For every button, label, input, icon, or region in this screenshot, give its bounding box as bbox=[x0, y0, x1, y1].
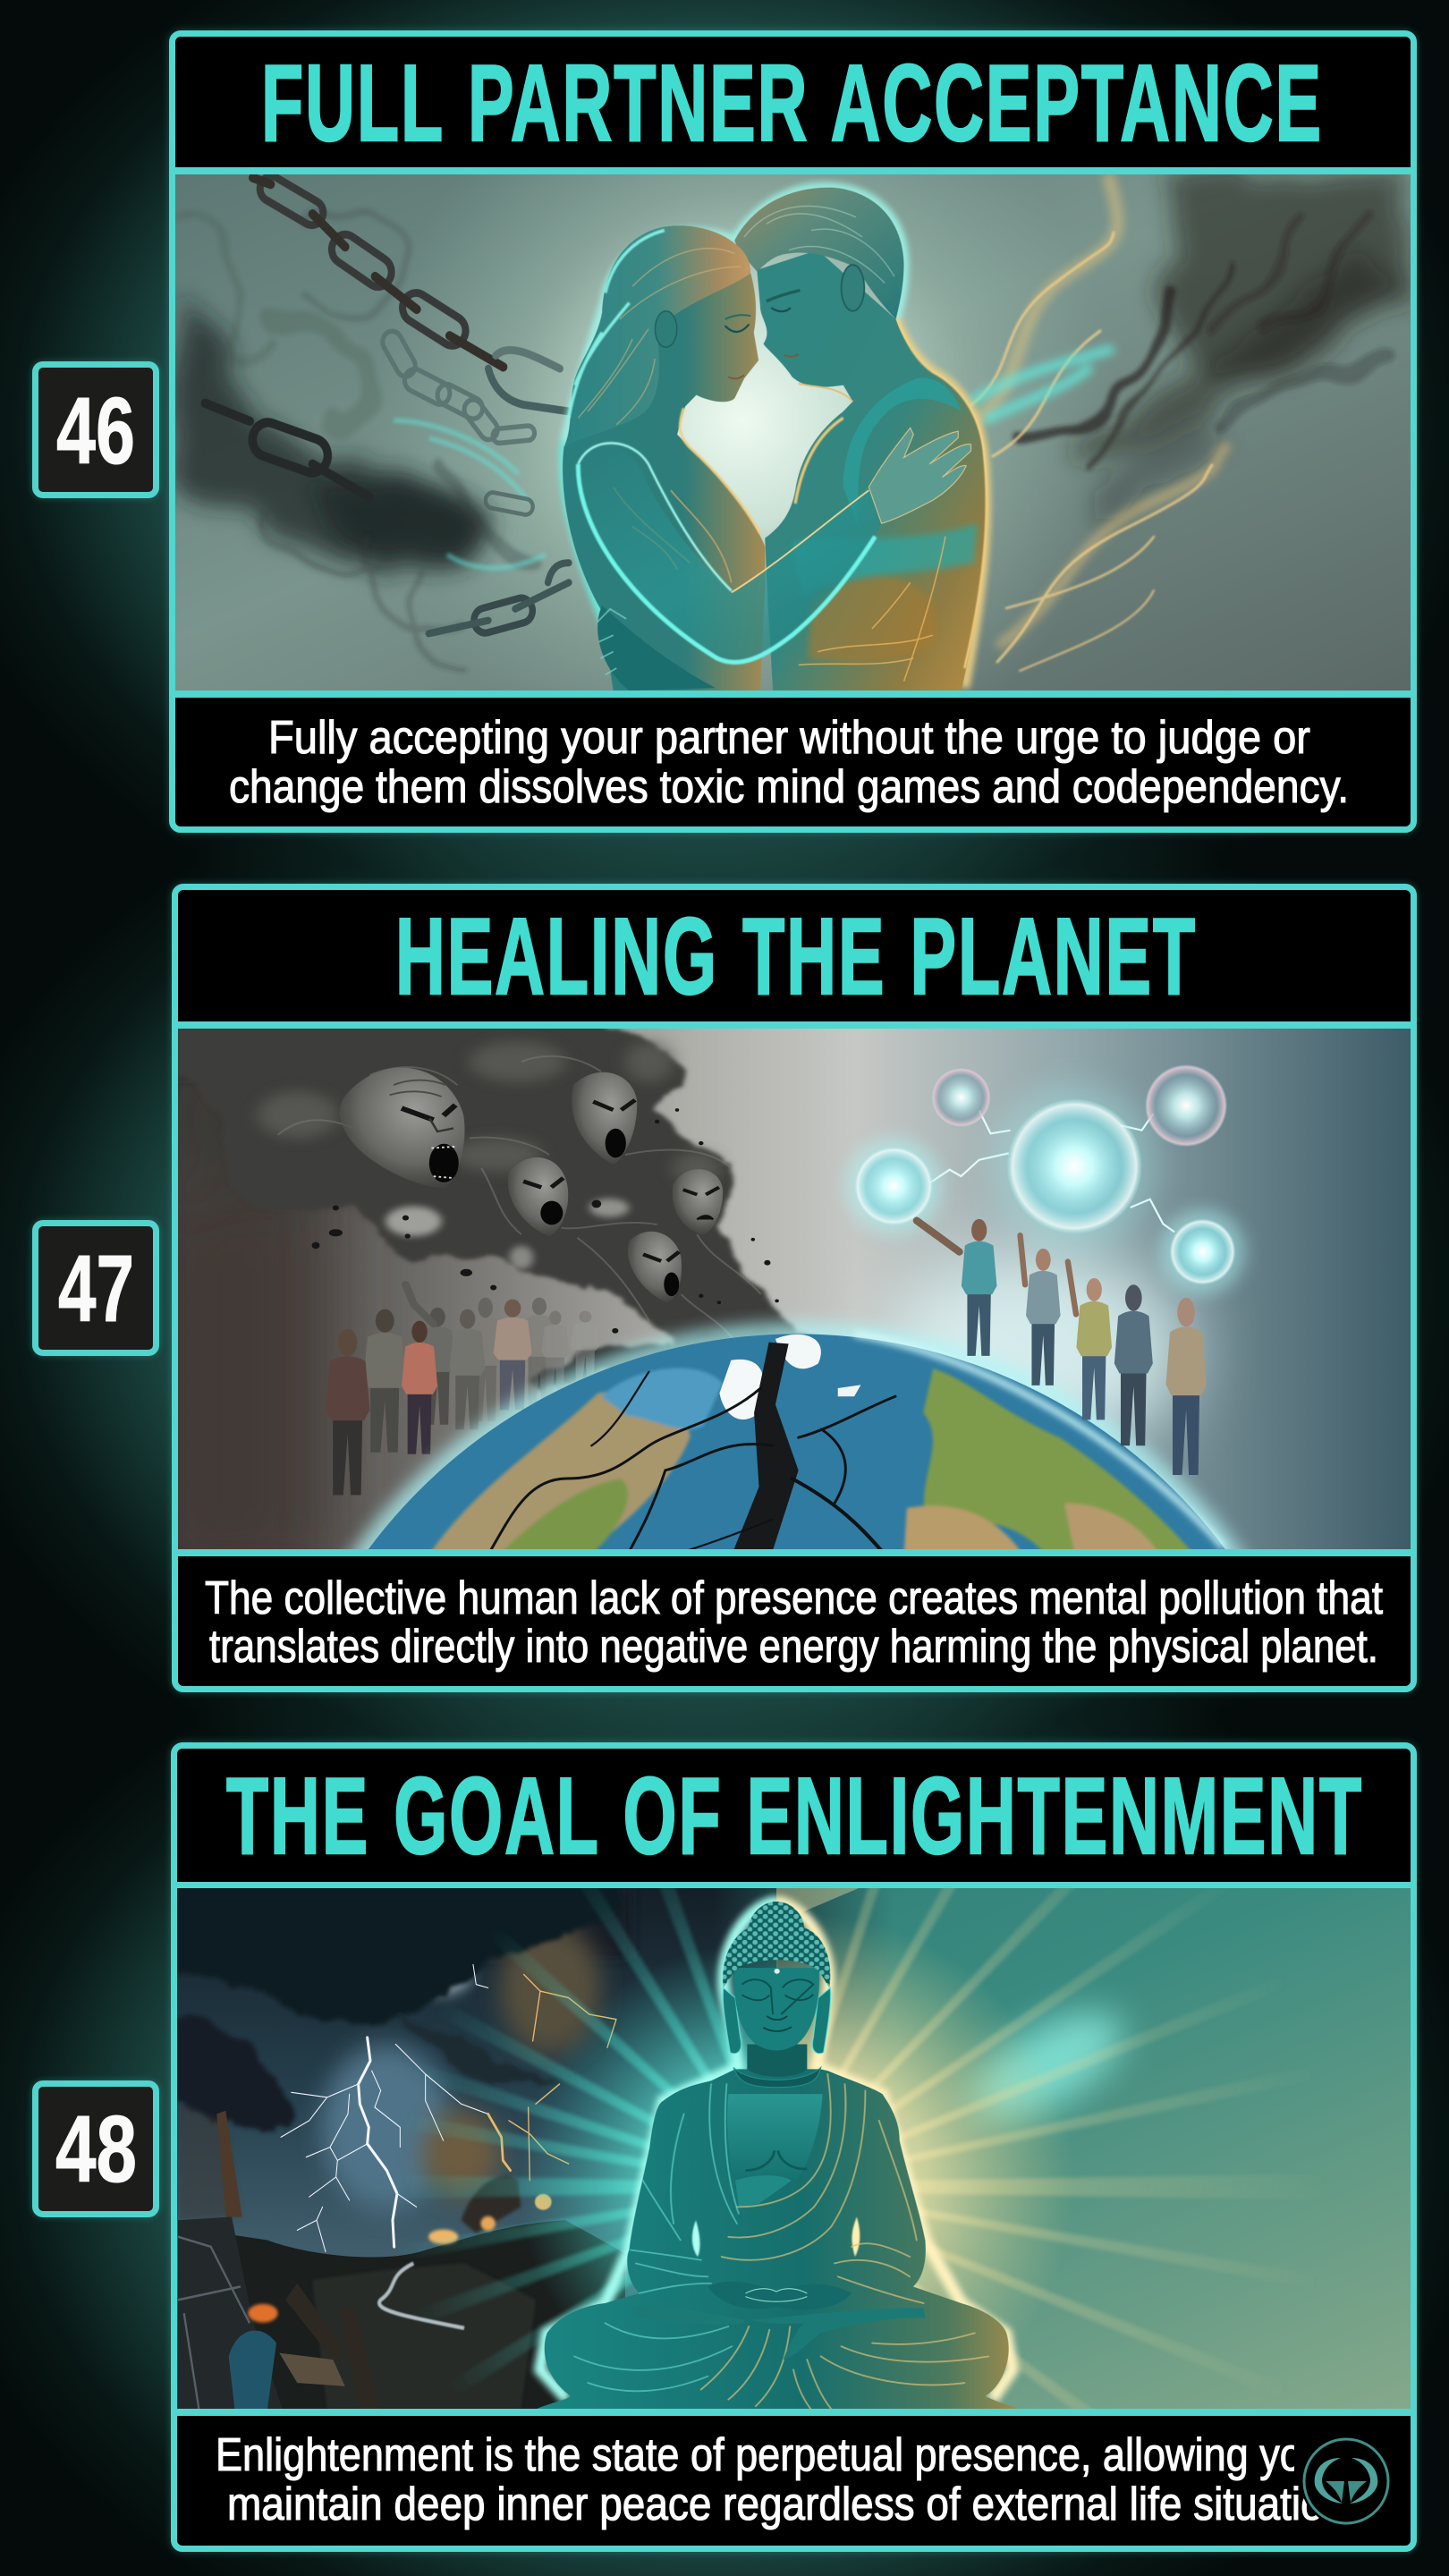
illustration: meditating buddha between storm and light bbox=[177, 1888, 1411, 2409]
smoke: left bbox=[175, 211, 546, 667]
smoke: right bbox=[1020, 174, 1411, 528]
crowd: healing people bbox=[917, 1219, 1207, 1475]
storm: clouds, lightning, ruins bbox=[166, 1875, 893, 2409]
face 4 bbox=[673, 1169, 723, 1234]
illustration: pollution faces, cracked earth and healing orbs bbox=[178, 1029, 1411, 1549]
panel: the goal of enlightenment bbox=[171, 1742, 1417, 2552]
crowd: unconscious people bbox=[326, 1284, 599, 1495]
number badge 47 bbox=[32, 1220, 159, 1356]
couple bbox=[563, 187, 987, 691]
buddha bbox=[537, 1902, 1020, 2409]
woman bbox=[563, 225, 766, 691]
face 3 bbox=[508, 1157, 568, 1236]
smoke fog: left bbox=[134, 1029, 1190, 1592]
earth: cracked globe bbox=[340, 1311, 1251, 1549]
face 2 bbox=[572, 1072, 637, 1165]
robe folds bbox=[574, 2074, 988, 2409]
chains bbox=[205, 172, 569, 636]
embracing arms bbox=[578, 428, 971, 691]
couple outer glow bbox=[564, 187, 986, 688]
debris bbox=[312, 1108, 779, 1334]
description: full partner acceptance: Fully accepting your partner without the urge to judge or bbox=[268, 712, 1310, 764]
smoke cloud with angry faces bbox=[154, 1009, 801, 1380]
orbs: positive energy bbox=[844, 1064, 1245, 1294]
buddha aura bbox=[540, 1902, 1013, 2400]
number badge 46 bbox=[32, 361, 159, 498]
number badge 48 bbox=[32, 2080, 159, 2217]
description: full partner acceptance bbox=[229, 712, 1349, 813]
panel: full partner acceptance bbox=[169, 30, 1417, 833]
illustration: couple embracing, chains and smoke dissolving bbox=[175, 174, 1411, 691]
man bbox=[734, 188, 987, 691]
face 5 bbox=[628, 1232, 682, 1302]
hands and feet bbox=[632, 2282, 925, 2360]
face 1 bbox=[340, 1068, 465, 1188]
light rays bbox=[392, 1657, 1331, 2519]
head bbox=[723, 1902, 831, 2054]
description: the goal of enlightenment bbox=[216, 2429, 1390, 2530]
panel: healing the planet bbox=[172, 884, 1417, 1692]
gold and cyan wisps bbox=[962, 179, 1225, 671]
description: healing the planet bbox=[205, 1572, 1383, 1673]
logo: circular emblem bbox=[1294, 2433, 1392, 2527]
robe and body bbox=[537, 2069, 1020, 2409]
